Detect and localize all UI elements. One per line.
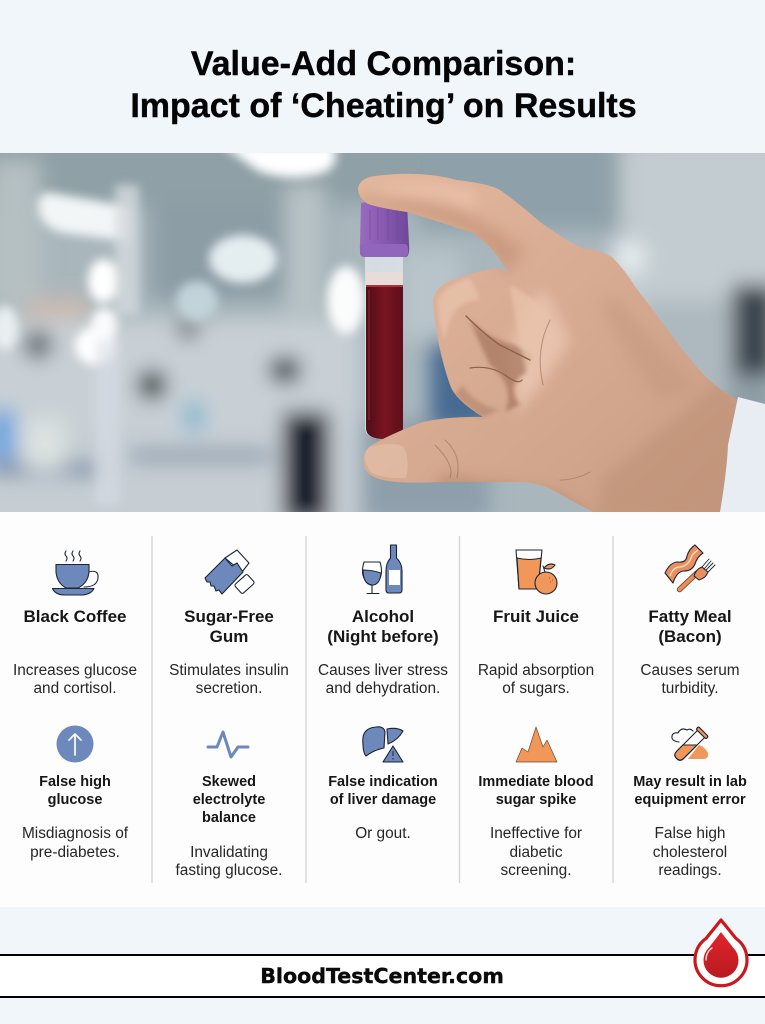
- icon: up arrow: [56, 726, 94, 762]
- heading: Sugar-Free: [184, 607, 274, 626]
- icon: gum pack: [205, 550, 255, 594]
- icon: liver with warning: [363, 727, 403, 762]
- consequence: diabetic: [509, 844, 563, 861]
- column: fatty meal: [633, 545, 747, 879]
- column: black coffee: [13, 551, 137, 861]
- description: turbidity.: [661, 680, 719, 697]
- heading: Fruit Juice: [493, 607, 579, 626]
- footer brand text: BloodTestCenter.com: [260, 964, 504, 988]
- column dividers: [152, 536, 613, 883]
- description: Increases glucose: [13, 662, 137, 679]
- heading: Fatty Meal: [648, 607, 732, 626]
- consequence: cholesterol: [653, 844, 727, 861]
- description: Causes serum: [640, 662, 740, 679]
- heading: Alcohol: [352, 607, 414, 626]
- icon: juice and orange: [516, 550, 557, 594]
- consequence: screening.: [500, 862, 572, 879]
- description: of sugars.: [502, 680, 570, 697]
- consequence: pre-diabetes.: [30, 844, 120, 861]
- description: and dehydration.: [326, 680, 440, 697]
- result: of liver damage: [330, 792, 436, 808]
- description: Rapid absorption: [478, 662, 594, 679]
- icon: bacon and fork: [665, 545, 715, 590]
- column: sugar-free gum: [169, 550, 289, 879]
- result: May result in lab: [633, 774, 747, 790]
- result: equipment error: [634, 792, 746, 808]
- icon: coffee cup: [52, 551, 98, 595]
- footer band: [0, 955, 765, 997]
- icon: pulse line: [208, 732, 248, 757]
- result: balance: [202, 810, 256, 826]
- consequence: Ineffective for: [490, 825, 582, 842]
- result: electrolyte: [193, 792, 265, 808]
- result: Immediate blood: [478, 774, 594, 790]
- heading: (Bacon): [658, 627, 722, 646]
- consequence: fasting glucose.: [176, 862, 282, 879]
- description: secretion.: [196, 680, 262, 697]
- icon: wine and bottle: [362, 545, 402, 594]
- icon: test tube error: [672, 727, 708, 763]
- description: and cortisol.: [34, 680, 116, 697]
- icon: sugar spike: [516, 727, 557, 762]
- title: [130, 45, 637, 125]
- result: sugar spike: [496, 792, 576, 808]
- hand shading: [360, 186, 760, 520]
- panel: comparison table: [0, 512, 765, 907]
- consequence: readings.: [658, 862, 722, 879]
- photo: hand holding blood test tube in a lab: [0, 153, 765, 512]
- consequence: False high: [654, 825, 726, 842]
- result: False high: [39, 774, 111, 790]
- title: Impact of ‘Cheating’ on Results: [130, 87, 637, 125]
- consequence: Invalidating: [190, 844, 268, 861]
- description: Stimulates insulin: [169, 662, 289, 679]
- description: Causes liver stress: [318, 662, 448, 679]
- result: Skewed: [202, 774, 256, 790]
- heading: (Night before): [327, 627, 439, 646]
- result: False indication: [328, 774, 438, 790]
- icon: blood drop logo: [695, 920, 747, 986]
- heading: Gum: [210, 627, 248, 646]
- column: fruit juice: [478, 550, 594, 879]
- title: Value-Add Comparison:: [191, 45, 576, 83]
- heading: Black Coffee: [24, 607, 126, 626]
- result: glucose: [48, 792, 102, 808]
- consequence: Or gout.: [355, 825, 411, 842]
- test tube: [360, 200, 409, 439]
- lab coat cuff: [720, 397, 765, 512]
- hand: [358, 174, 760, 520]
- column: alcohol: [318, 545, 448, 842]
- consequence: Misdiagnosis of: [22, 825, 129, 842]
